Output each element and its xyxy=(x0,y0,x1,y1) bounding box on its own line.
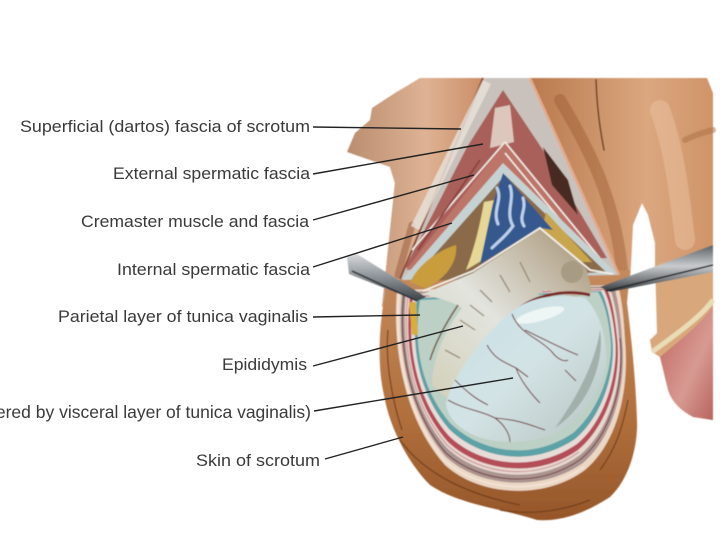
label: external spermatic fascia: External spermatic fascia xyxy=(113,164,311,183)
label: external spermatic fascia xyxy=(113,144,483,183)
testis xyxy=(446,296,606,442)
penis and right thigh stump xyxy=(650,262,713,420)
upper cremaster muscle xyxy=(405,90,607,268)
label: skin of scrotum xyxy=(196,437,403,470)
layer: outer skin edge xyxy=(396,285,626,491)
right forceps xyxy=(600,245,713,292)
label: epididymis xyxy=(222,326,463,374)
label: cremaster xyxy=(81,175,474,231)
scrotal skin creases xyxy=(387,330,628,512)
layer: parietal tunica, teal xyxy=(415,291,613,457)
internal spermatic fascia band xyxy=(402,163,617,280)
layer: internal fascia xyxy=(411,290,616,462)
label: skin of scrotum: Skin of scrotum xyxy=(196,451,320,470)
epididymis upper border xyxy=(423,228,613,291)
cavity lined by parietal layer xyxy=(418,292,611,450)
epididymis xyxy=(423,229,592,398)
testicular vessels xyxy=(448,314,578,442)
label: internal spermatic fascia xyxy=(117,223,452,279)
groove above testis xyxy=(515,293,590,312)
pale central fascia xyxy=(490,105,514,148)
white fascial edges xyxy=(412,142,603,262)
painted anatomy xyxy=(347,78,713,520)
layer: external fascia xyxy=(405,288,620,475)
skin folds and highlights xyxy=(398,80,713,275)
cavity of opened fascia xyxy=(410,175,606,282)
label: cremaster: Cremaster muscle and fascia xyxy=(81,212,310,231)
left forceps xyxy=(347,254,426,301)
wound: outer fascia band xyxy=(400,78,619,279)
cream fat stripe xyxy=(466,200,495,270)
right yellow fat xyxy=(542,212,592,262)
skin: thigh and lower abdomen xyxy=(382,78,713,307)
epididymis striations xyxy=(430,262,530,360)
label: testis xyxy=(0,378,513,422)
epididymis head xyxy=(561,261,583,283)
yellow fat strip xyxy=(409,302,418,335)
label: internal spermatic fascia: Internal spermatic fascia xyxy=(117,260,311,279)
yellow fat patch xyxy=(410,245,456,288)
testis shadow xyxy=(555,330,601,428)
thin layer stripes xyxy=(398,291,621,487)
lower cremaster stripes xyxy=(406,142,603,270)
label: superficial fascia: Superficial (dartos) fascia of scrotum xyxy=(20,117,310,136)
wound rim xyxy=(400,78,619,279)
layer: cremaster xyxy=(408,289,618,468)
skin: left lobe xyxy=(347,78,490,307)
label: epididymis: Epididymis xyxy=(222,355,307,374)
layer: dartos fascia xyxy=(401,286,623,483)
testis highlight xyxy=(514,303,566,327)
dark wedge xyxy=(543,147,578,215)
spermatic cord veins, blue xyxy=(480,173,553,264)
label: parietal layer: Parietal layer of tunica vaginalis xyxy=(58,307,308,326)
scrotum skin xyxy=(380,270,637,520)
